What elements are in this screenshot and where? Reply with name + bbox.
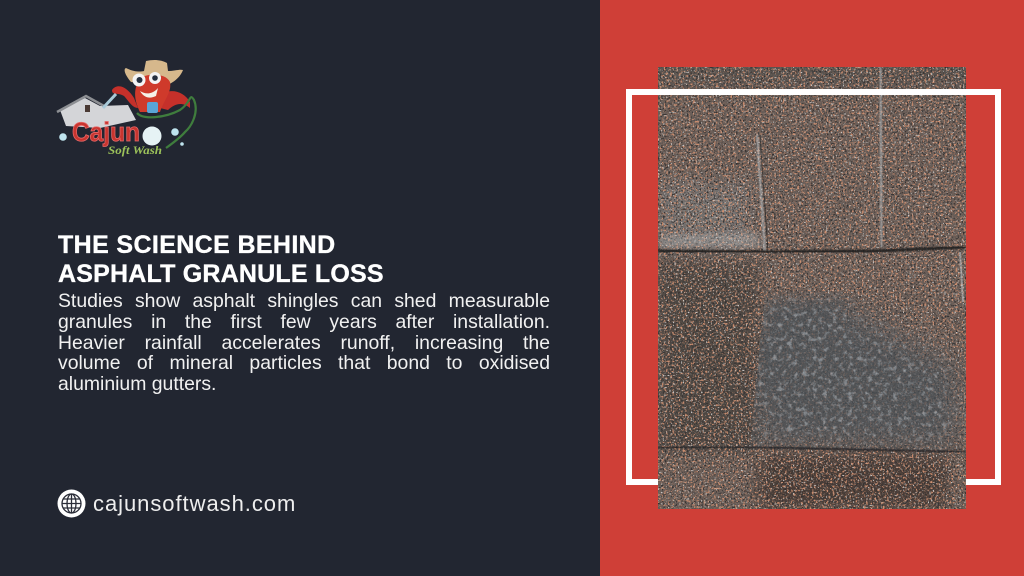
body text: granules in the first few years after installation.	[58, 311, 550, 333]
tonal variation	[648, 57, 978, 509]
body text: Studies show asphalt shingles can shed measurable	[58, 290, 550, 312]
body text: volume of mineral particles that bond to oxidised	[58, 352, 550, 374]
logo crawfish mascot	[112, 60, 190, 113]
granules	[658, 67, 966, 509]
panel: red right background	[600, 0, 1024, 576]
panel: dark left background	[0, 0, 600, 576]
logo house	[57, 96, 136, 128]
icon: globe	[58, 490, 86, 518]
white frame behind photo	[626, 89, 1001, 485]
website link	[58, 490, 296, 518]
body text	[58, 290, 550, 395]
heading: THE SCIENCE BEHIND	[58, 231, 336, 259]
website address: cajunsoftwash.com	[93, 491, 296, 516]
heading: ASPHALT GRANULE LOSS	[58, 260, 384, 288]
logo spray wand and hose	[103, 94, 196, 148]
photo: weathered asphalt shingles	[658, 67, 966, 509]
body text: aluminium gutters.	[58, 373, 216, 395]
worn grey patch	[750, 291, 966, 450]
logo wordmark Cajun: Cajun	[72, 117, 140, 147]
body text: Heavier rainfall accelerates runoff, increasing the	[58, 332, 550, 354]
shingle base tone	[658, 67, 966, 509]
shingle seams	[658, 67, 966, 452]
logo bubbles	[59, 126, 184, 146]
white frame top bar over photo	[626, 89, 1001, 95]
logo: Cajun Soft Wash	[56, 60, 197, 157]
logo wordmark Soft Wash: Soft Wash	[108, 143, 162, 157]
pale wear above seam	[660, 232, 763, 248]
heading	[58, 231, 384, 288]
